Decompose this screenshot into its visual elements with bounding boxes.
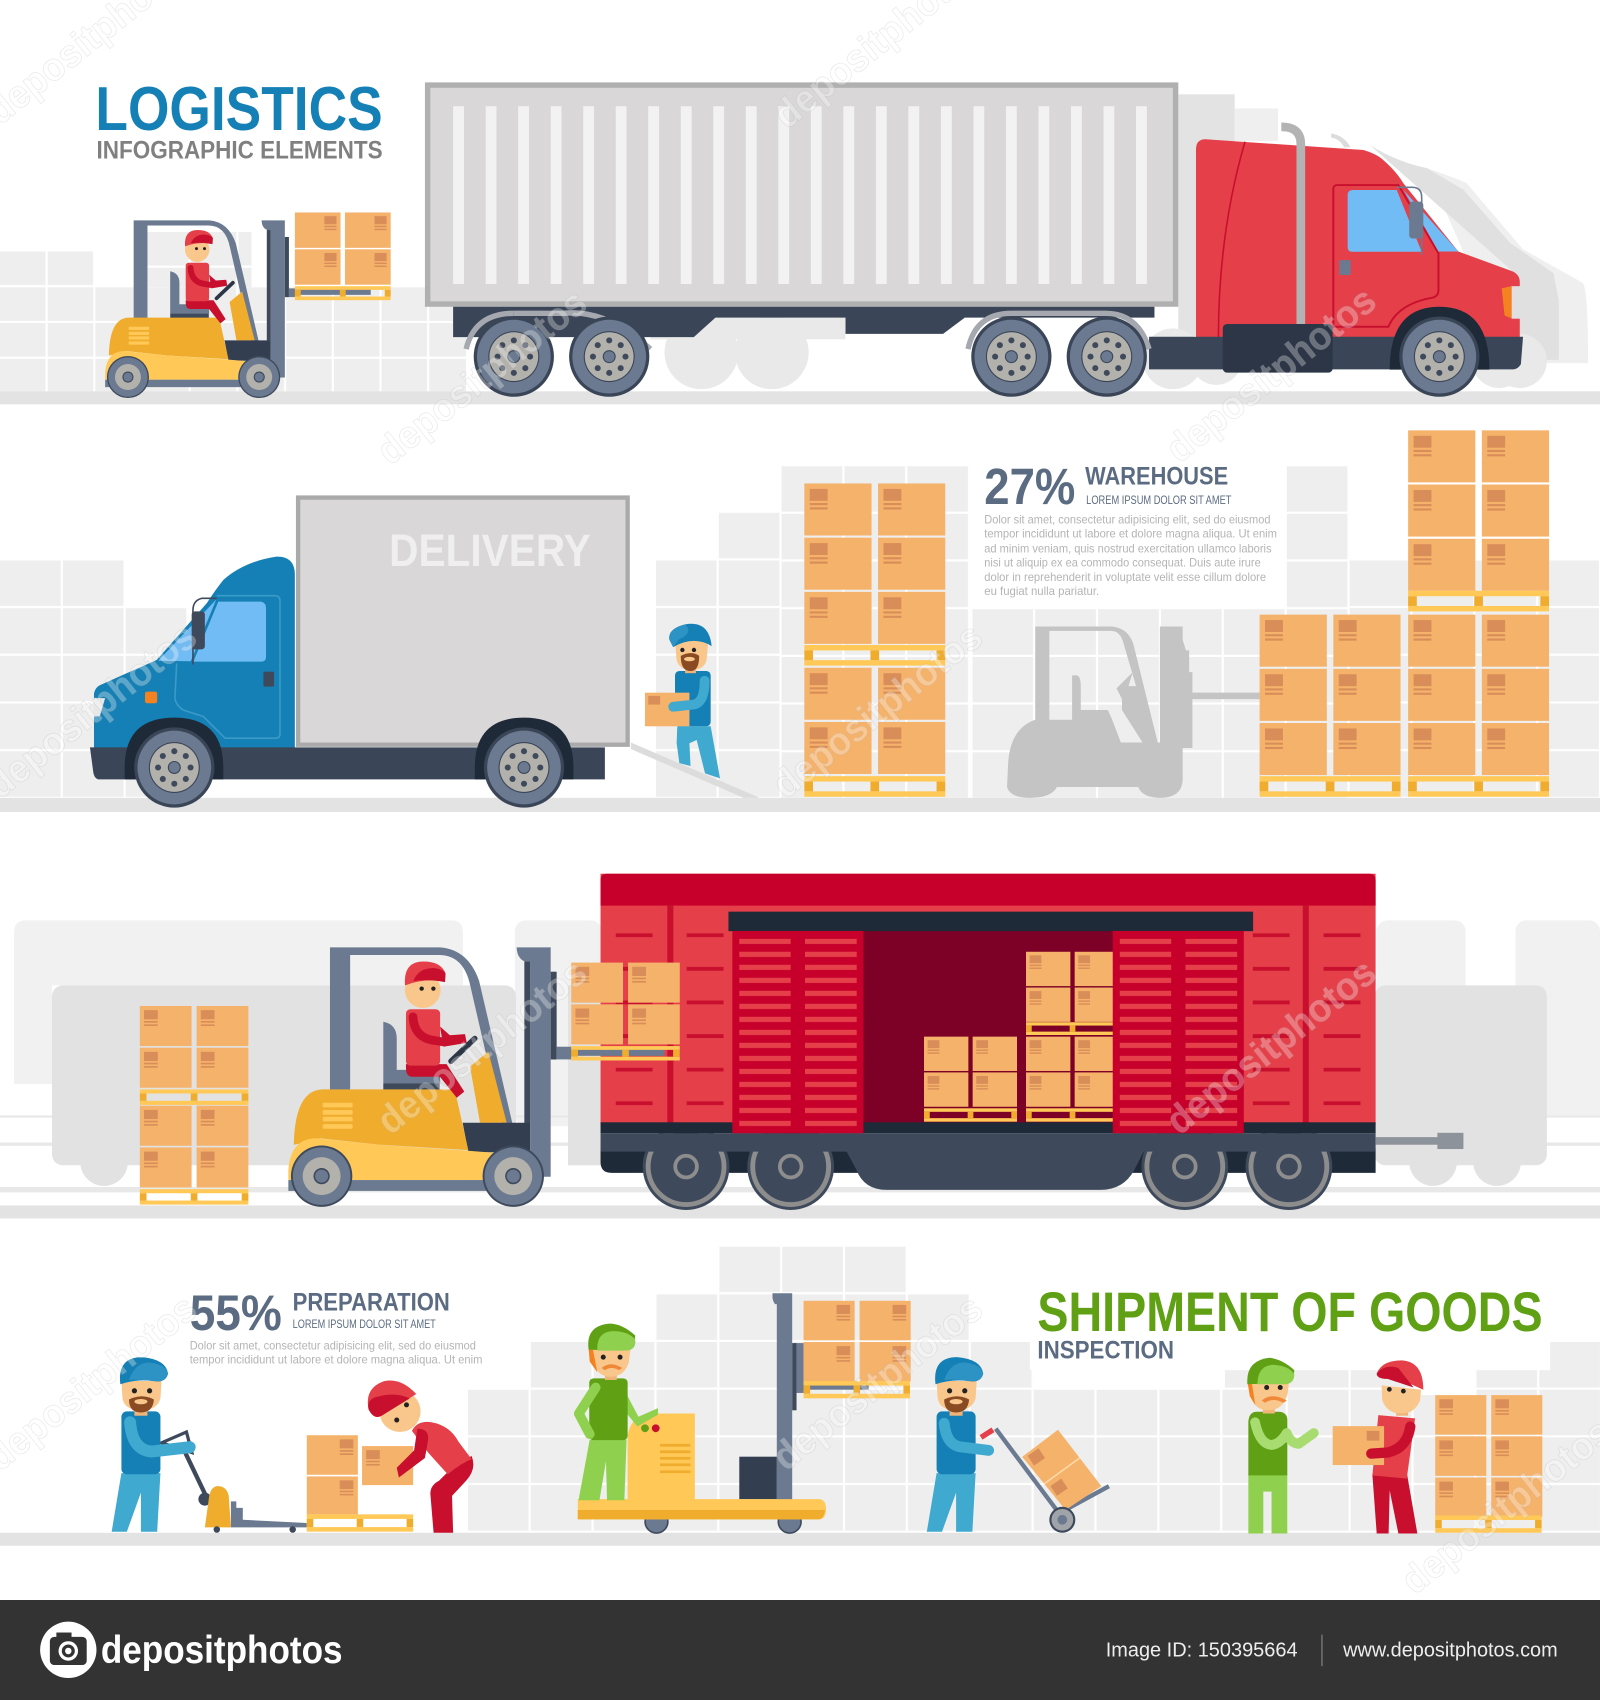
footer logo icon [40, 1622, 96, 1678]
windshield [158, 599, 216, 661]
worker with pallet jack [112, 1357, 307, 1533]
warehouse heading: WAREHOUSE [1085, 463, 1228, 491]
warehouse background tiles, row four [468, 1247, 1600, 1533]
container [428, 85, 1176, 304]
percent figure: 55% [190, 1285, 282, 1341]
watermarks: depositphotos [369, 281, 595, 473]
container ribs [453, 106, 1147, 284]
cab window [193, 602, 266, 662]
warehouse paragraph: tempor incididunt ut labore et dolore magna aliqua. Ut enim [984, 528, 1277, 541]
green inspector [1247, 1358, 1314, 1533]
forklift with driver, row three [288, 947, 571, 1207]
warehouse paragraph [984, 514, 1277, 598]
stacker battery block [739, 1457, 777, 1499]
blue cab [94, 557, 295, 748]
wagon roof [601, 874, 1376, 906]
windshield [1403, 190, 1458, 251]
warehouse paragraph: nisi ut aliquip ex ea commodo consequat. Duis aute irure [984, 556, 1261, 569]
warehouse background tiles, row two [0, 466, 1600, 798]
box stack with pallet [307, 1435, 413, 1532]
box stack on forks, row one [295, 212, 391, 300]
cab body [1196, 139, 1520, 337]
warehouse sub heading: LOREM IPSUM DOLOR SIT AMET [1086, 493, 1231, 507]
warehouse stack middle [804, 483, 945, 797]
headlight [1502, 286, 1520, 319]
red worker legs [430, 1456, 473, 1533]
percent figure: 27% [984, 458, 1075, 515]
cargo box [298, 498, 628, 745]
right sliding door [1113, 931, 1244, 1133]
door handle [1339, 260, 1351, 275]
wagon cargo [924, 952, 1119, 1122]
coupler [1376, 1133, 1463, 1149]
box stacks left, row three [140, 1006, 248, 1205]
door outline [175, 596, 280, 738]
chassis [90, 747, 605, 779]
preparation paragraph: Dolor sit amet, consectetur adipisicing elit, sed do eiusmod [190, 1340, 476, 1353]
image id: Image ID: 150395664 [1106, 1639, 1298, 1661]
truck frame and tank [1149, 324, 1523, 373]
preparation sub heading: LOREM IPSUM DOLOR SIT AMET [293, 1317, 436, 1331]
ramp [631, 743, 760, 798]
box stack on forks, row three [571, 963, 680, 1060]
stat: 55 percent preparation [190, 1285, 482, 1367]
pallet jack [162, 1432, 307, 1533]
warehouse paragraph: Dolor sit amet, consectetur adipisicing elit, sed do eiusmod [984, 514, 1270, 527]
warehouse paragraph: ad minim veniam, quis nostrud exercitation ullamco laboris [984, 542, 1272, 555]
trailer chassis [453, 307, 1154, 337]
floor strips [0, 391, 1600, 1546]
red worker arm [397, 1429, 428, 1478]
stat: 27 percent warehouse [984, 458, 1277, 598]
subtitle: infographic elements: INFOGRAPHIC ELEMENTS [96, 136, 383, 164]
preparation paragraph [190, 1340, 482, 1367]
train wagon [601, 874, 1463, 1210]
preparation paragraph: tempor incididunt ut labore et dolore magna aliqua. Ut enim [190, 1354, 482, 1367]
bumper lamp [93, 698, 105, 717]
preparation heading: PREPARATION [293, 1289, 450, 1317]
door rail [728, 912, 1253, 931]
head lamp [145, 692, 157, 703]
warehouse background tiles, row one [0, 232, 466, 391]
forklift with driver, row one [105, 220, 299, 398]
wagon wheels [643, 1123, 729, 1210]
title: logistics: LOGISTICS [95, 75, 383, 144]
subtitle: inspection: INSPECTION [1037, 1336, 1174, 1364]
wagon underframe [601, 1133, 1376, 1190]
blue worker figure [112, 1357, 190, 1532]
door handle [263, 672, 274, 687]
stacker with green worker [578, 1293, 911, 1533]
red worker torso [412, 1422, 472, 1474]
stacker mast [772, 1293, 792, 1500]
watermarks: depositphotos [1158, 279, 1384, 471]
watermarks: depositphotos [369, 951, 595, 1143]
fenders [466, 313, 1149, 349]
stacker body [628, 1414, 695, 1500]
watermarks: depositphotos [765, 615, 991, 807]
interior [863, 930, 1114, 1125]
website url: www.depositphotos.com [1342, 1639, 1558, 1661]
stacker wheels [645, 1510, 801, 1533]
ghost forklift silhouette [1007, 627, 1260, 798]
warehouse stacks right [1260, 430, 1549, 797]
footer divider [1321, 1635, 1322, 1666]
blue worker with hand truck [927, 1357, 1109, 1533]
panel grooves [616, 905, 1360, 1123]
stacker carriage [792, 1343, 804, 1410]
truck ghost shadow [1178, 94, 1588, 363]
carried box [362, 1446, 413, 1485]
cab window [1348, 190, 1422, 252]
background train silhouettes [0, 920, 1600, 1192]
wheels [134, 727, 214, 808]
cab side curve [1218, 142, 1245, 337]
red worker head [379, 1391, 421, 1432]
warehouse paragraph: dolor in reprehenderit in voluptate velit esse cillum dolore [984, 571, 1266, 584]
stacker boxes [804, 1301, 911, 1398]
wagon underframe rear [601, 1149, 1376, 1173]
footer bar [0, 1600, 1600, 1700]
box stack right, row four [1435, 1395, 1542, 1533]
green worker figure [579, 1324, 658, 1500]
delivery label: DELIVERY [389, 525, 591, 576]
exhaust stack [1281, 127, 1301, 324]
dark sill [601, 1122, 1376, 1133]
ghost wheels [650, 315, 1547, 389]
watermarks: depositphotos [765, 1287, 991, 1479]
semi truck [428, 85, 1588, 397]
mirror [192, 598, 217, 664]
worker with box, row two [645, 624, 720, 778]
warehouse paragraph: eu fugiat nulla pariatur. [984, 585, 1099, 598]
cab door [1333, 185, 1438, 327]
red worker with box [1333, 1360, 1423, 1533]
stacker base [578, 1499, 826, 1519]
mirror [1397, 187, 1423, 255]
watermarks: depositphotos [1158, 951, 1384, 1143]
hand truck [981, 1429, 1109, 1533]
bending red worker [362, 1380, 473, 1533]
blue worker figure [927, 1357, 989, 1532]
wagon body [601, 874, 1376, 1125]
left sliding door [732, 931, 863, 1133]
delivery truck [90, 498, 628, 808]
truck wheels [474, 317, 554, 397]
footer brand name: depositphotos [101, 1629, 343, 1672]
